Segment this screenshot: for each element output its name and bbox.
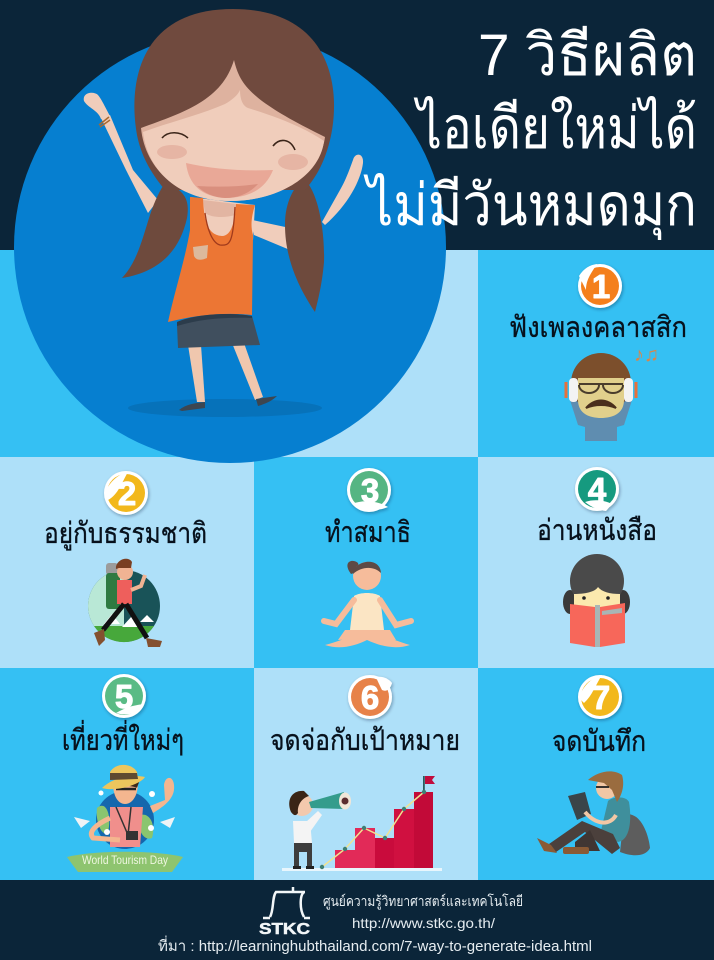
icon: man writing in notebook [537,771,650,855]
badge 6: 6 [361,679,379,716]
icon: man with telescope and rising bar chart [282,776,442,871]
icon: tourist with world tourism day ribbon [67,765,183,872]
title [363,23,697,241]
icon: meditating woman [324,561,411,647]
footer organisation name: ศูนย์ความรู้วิทยาศาสตร์และเทคโนโลยี [323,893,523,910]
item 1 [509,264,687,441]
badge 7 [578,675,622,719]
label 3: ทำสมาธิ [325,517,411,549]
label 4: อ่านหนังสือ [537,515,657,547]
item 2 [44,471,207,647]
badge 3 [347,468,391,512]
badge 4: 4 [588,471,607,508]
logo: STKC [259,887,311,938]
badge 5 [102,674,146,718]
item 5 [62,674,184,872]
icon: man with headphones: ♪♫ [634,344,659,366]
character: happy girl [84,9,363,417]
label 2: อยู่กับธรรมชาติ [44,518,207,551]
blue circle behind character [14,31,446,463]
item 3 [324,468,411,647]
badge 4 [575,467,619,511]
footer url: http://www.stkc.go.th/ [352,915,495,931]
badge 5: 5 [115,678,133,715]
icon: girl reading book [563,554,630,647]
footer [158,887,592,955]
item 6 [270,675,460,871]
badge 7: 7 [592,679,610,716]
badge 2: 2 [118,475,136,512]
item 4 [537,467,657,647]
badge 1: 1 [592,268,610,305]
icon: hiker [88,559,162,647]
label 7: จดบันทึก [552,726,646,758]
title: 7 วิธีผลิต [478,23,697,88]
label 5: เที่ยวที่ใหม่ๆ [62,720,184,757]
label 1: ฟังเพลงคลาสสิก [509,312,687,344]
panel: grid background [0,250,714,880]
icon: man with headphones [566,344,659,441]
badge 1 [578,264,622,308]
badge 6 [348,675,392,719]
badge 2 [104,471,148,515]
label 6: จดจ่อกับเป้าหมาย [270,725,460,757]
source line: ที่มา : http://learninghubthailand.com/7-way-to-generate-idea.html [158,935,592,955]
item 7 [537,675,650,855]
badge 3: 3 [361,472,379,509]
logo: STKC: STKC [259,921,311,938]
icon: tourist with world tourism day ribbon: World Tourism Day [82,853,168,867]
